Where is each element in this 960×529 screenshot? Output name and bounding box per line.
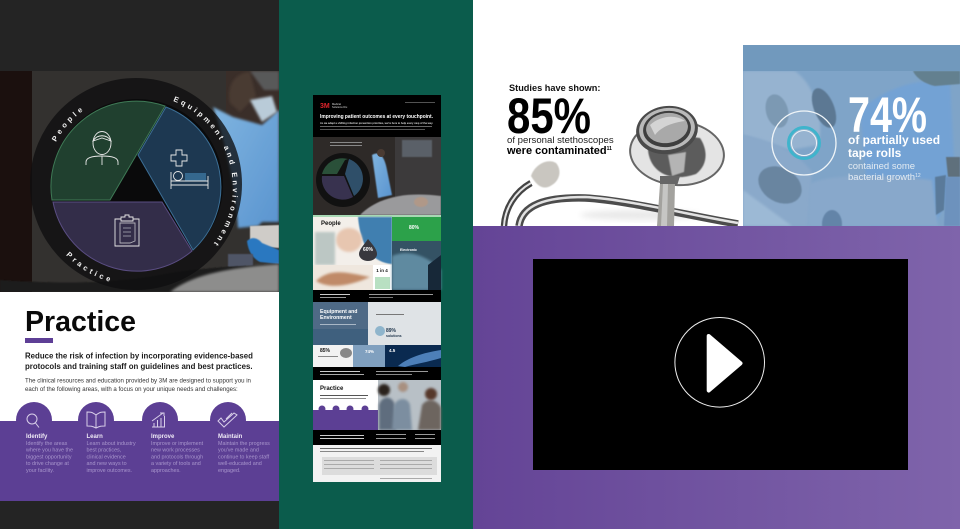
stem bbox=[660, 176, 680, 186]
column: improve: Improve or implement bbox=[151, 441, 204, 447]
column: identify: to drive change at bbox=[26, 461, 69, 467]
icon: play button bbox=[675, 318, 764, 407]
stat: 85%: 85% bbox=[507, 88, 591, 144]
thumbnail header: 3M bbox=[320, 103, 330, 110]
column: improve: approaches. bbox=[151, 468, 181, 474]
panel: green column bbox=[279, 0, 473, 529]
panel: tape rolls stat bbox=[743, 45, 960, 238]
diaphragm disc bbox=[626, 116, 728, 190]
column: improve: new work processes bbox=[151, 448, 200, 454]
column: identify bbox=[25, 414, 73, 474]
column: identify: Identify bbox=[26, 434, 48, 440]
thumbnail equipment and environment section: solutions bbox=[386, 334, 402, 338]
subheading bbox=[25, 352, 253, 371]
thumbnail header: Solutions Div. bbox=[332, 105, 348, 109]
text: personal stethoscopes: of personal stethoscopes bbox=[507, 135, 614, 146]
thumbnail equipment and environment section: Environment bbox=[320, 315, 352, 321]
column: maintain: you've made and bbox=[218, 448, 259, 454]
column: maintain: well-educated and bbox=[217, 461, 262, 467]
wheel diagram bbox=[30, 78, 242, 290]
panel: video section bbox=[473, 226, 960, 529]
icon: growth chart bbox=[152, 413, 165, 427]
thumbnail black band two bbox=[313, 367, 441, 380]
icon: target rings bbox=[772, 111, 836, 175]
column: learn: best practices, bbox=[86, 448, 122, 454]
label: practice: Practice bbox=[66, 252, 110, 282]
icon: magnifier bbox=[27, 414, 39, 428]
column: improve: Improve bbox=[151, 434, 175, 440]
ear tip bbox=[531, 161, 559, 188]
segment: practice bbox=[53, 202, 192, 271]
column: identify: your facility. bbox=[26, 468, 54, 474]
body text bbox=[25, 378, 251, 393]
column: learn: and new ways to bbox=[86, 461, 127, 467]
thumbnail header: Improving patient outcomes at every touchpoint. bbox=[320, 114, 434, 120]
thumbnail stats row: 85% bbox=[320, 348, 331, 354]
column: learn: Learn bbox=[86, 434, 103, 440]
column: identify: biggest opportunity bbox=[26, 454, 72, 460]
panel: practice slide bbox=[0, 71, 279, 501]
icon: clipboard bbox=[115, 215, 139, 246]
purple band bbox=[0, 402, 279, 501]
text: bacterial growth: 12 bbox=[915, 173, 921, 179]
photo: clinician at bedside bbox=[0, 71, 279, 292]
subheading: Reduce the risk of infection by incorporating evidence-based bbox=[25, 352, 253, 360]
body text: The clinical resources and education provided by 3M are designed to support you in bbox=[25, 378, 251, 384]
thumbnail people section bbox=[313, 215, 441, 290]
panel: stethoscope stat bbox=[473, 0, 960, 226]
heading: Practice: Practice bbox=[25, 306, 136, 338]
thumbnail practice section bbox=[313, 380, 441, 430]
thumbnail equipment and environment section bbox=[313, 302, 441, 345]
icon: cross and bed bbox=[171, 150, 208, 189]
thumbnail people section: 60% bbox=[363, 247, 374, 253]
thumbnail equipment and environment section: 89% bbox=[386, 328, 397, 334]
image: stethoscope bbox=[504, 102, 738, 226]
text: bacterial growth: bacterial growth bbox=[848, 172, 915, 183]
text: bacterial growth: contained some bbox=[848, 161, 915, 172]
thumbnail header bbox=[320, 102, 435, 130]
subheading: protocols and training staff on guidelines and best practices. bbox=[25, 362, 253, 371]
thumbnail practice section: Practice bbox=[320, 386, 344, 392]
label: equipment and environment: Equipment and Environment bbox=[174, 96, 238, 246]
label: people: People bbox=[52, 108, 82, 142]
column: maintain: continue to keep staff bbox=[218, 454, 270, 460]
segment: people bbox=[51, 101, 165, 200]
text: were contaminated: were contaminated bbox=[507, 145, 607, 157]
thumbnail black band three bbox=[313, 430, 441, 445]
column: learn: clinical evidence bbox=[86, 454, 126, 460]
text: bacterial growth bbox=[848, 161, 921, 183]
thumbnail hero photo bbox=[313, 137, 441, 215]
stat: 74%: 74% bbox=[848, 87, 927, 143]
text: studies have shown: Studies have shown: bbox=[509, 83, 600, 93]
video frame bbox=[533, 259, 908, 470]
thumbnail people section: People bbox=[321, 221, 341, 227]
thumbnail equipment and environment section: Equipment and bbox=[320, 309, 357, 315]
text: partially used tape rolls bbox=[848, 133, 940, 160]
thumbnail people section: 1 in 4 bbox=[376, 268, 388, 273]
panel: full infographic thumbnail bbox=[313, 95, 441, 482]
segment: equipment and environment bbox=[138, 107, 221, 250]
column: maintain bbox=[217, 413, 270, 474]
thumbnail stats row: 4.5 bbox=[389, 348, 396, 353]
thumbnail stats row: 74% bbox=[365, 349, 374, 354]
text: were contaminated: 11 bbox=[607, 146, 612, 152]
column: learn bbox=[86, 412, 136, 474]
column: learn: improve outcomes. bbox=[86, 468, 132, 474]
icon: person bbox=[86, 132, 118, 165]
column: identify: where you have the bbox=[25, 448, 73, 454]
text: partially used tape rolls: of partially used bbox=[848, 133, 940, 147]
chest piece head bbox=[633, 102, 701, 158]
column: improve bbox=[151, 413, 204, 474]
text: partially used tape rolls: tape rolls bbox=[848, 146, 902, 160]
thumbnail people section: Electronic bbox=[400, 248, 417, 252]
thumbnail black band one bbox=[313, 290, 441, 302]
icon: book bbox=[87, 412, 105, 428]
thumbnail header: As we adapt a shifting infection prevention priorities, we're here to help every step of the way. bbox=[320, 121, 433, 125]
body text: each of the following areas, with a focus on your unique needs and challenges: bbox=[25, 386, 238, 393]
accent bar bbox=[25, 338, 53, 343]
column: maintain: Maintain the progress bbox=[218, 441, 270, 447]
column: learn: Learn about industry bbox=[86, 441, 136, 447]
icon: check marks bbox=[218, 413, 237, 427]
thumbnail stats row bbox=[313, 345, 441, 367]
thumbnail header: Medical bbox=[332, 102, 341, 106]
column: improve: a variety of tools and bbox=[151, 461, 201, 467]
thumbnail people section: 80% bbox=[409, 225, 420, 231]
white content block bbox=[0, 292, 279, 421]
column: maintain: Maintain bbox=[218, 434, 243, 440]
column: maintain: engaged. bbox=[218, 468, 240, 474]
tube bbox=[504, 183, 531, 226]
column: improve: and protocols through bbox=[151, 454, 203, 460]
image: tape rolls bbox=[743, 71, 960, 238]
thumbnail footer notes bbox=[313, 445, 441, 482]
column: identify: Identify the areas bbox=[26, 441, 68, 447]
